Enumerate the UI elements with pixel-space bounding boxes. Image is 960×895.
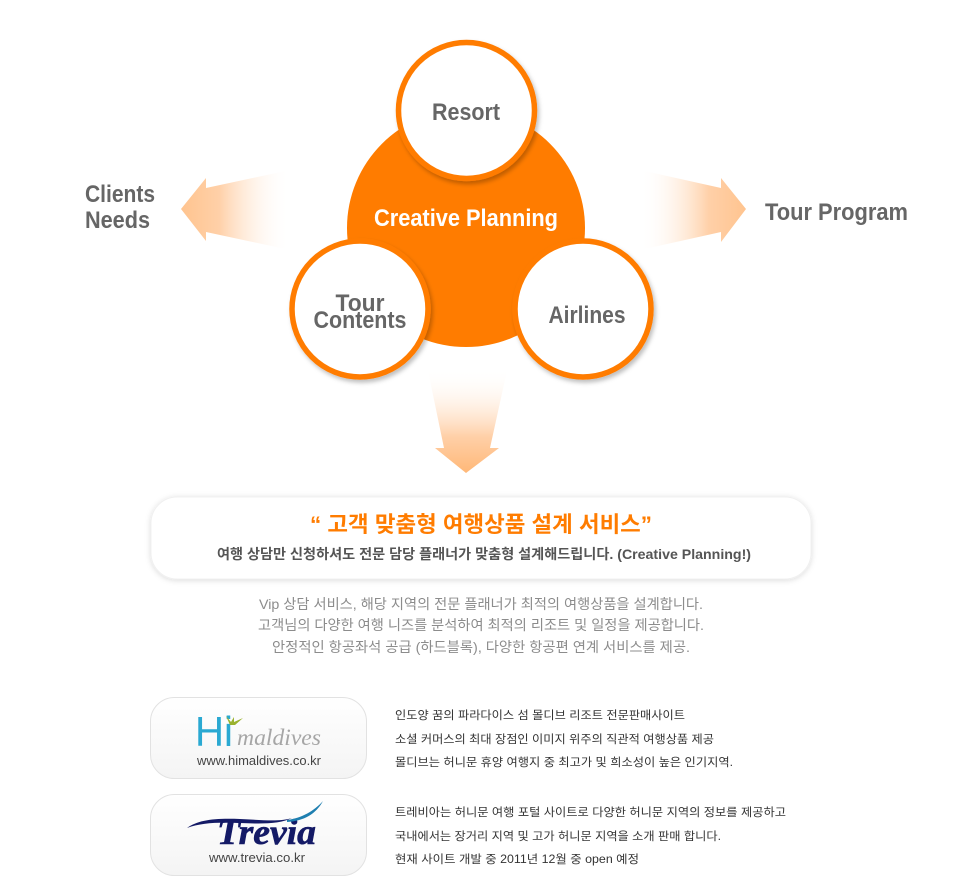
text block: service description: 안정적인 항공좌석 공급 (하드블록), 다양한 항공편 연계 서비스를 제공. <box>272 639 690 655</box>
arrow: to Tour Program <box>640 170 746 250</box>
diagram: creative planning circles <box>292 42 651 377</box>
text block: Trevia description: 트레비아는 허니문 여행 포털 사이트로 다양한 허니문 지역의 정보를 제공하고 <box>395 805 786 819</box>
logo: Himaldives: Hi <box>195 708 233 755</box>
panel: Trevia logo card <box>150 794 366 876</box>
text block: Himaldives description <box>395 709 733 769</box>
text block: Trevia description: 국내에서는 장거리 지역 및 고가 허니문 지역을 소개 판매 합니다. <box>395 830 721 843</box>
center circle <box>347 109 585 347</box>
logo: Trevia <box>187 801 323 852</box>
panel: Himaldives logo card <box>150 698 366 778</box>
circle: Airlines: Airlines <box>548 302 626 329</box>
subheading: 여행 상담만 신청하셔도 전문 담당 플래너가 맞춤형 설계해드립니다. (Creative Planning!) <box>217 546 751 562</box>
circle: Resort <box>398 42 534 178</box>
text block: Trevia description: 현재 사이트 개발 중 2011년 12월 중 open 예정 <box>395 853 639 866</box>
center label: Creative Planning <box>374 205 558 232</box>
label: Needs: Needs <box>85 207 150 234</box>
logo: Himaldives: maldives <box>237 725 321 750</box>
circle: Tour Contents: Tour <box>336 290 384 317</box>
label: Clients Needs: Clients <box>85 181 155 208</box>
circle: Tour Contents <box>292 241 428 377</box>
arrow: to Clients Needs <box>181 170 290 250</box>
logo url: www.himaldives.co.kr <box>196 754 321 768</box>
text block: Trevia description <box>395 805 786 866</box>
label: Tour Program: Tour Program <box>765 199 908 226</box>
logo: Himaldives <box>195 708 321 755</box>
circle: Resort: Resort <box>432 99 500 126</box>
circle: Tour Contents: Contents <box>314 307 406 334</box>
arrow: down to service box <box>427 366 508 473</box>
text block: Himaldives description: 몰디브는 허니문 휴양 여행지 중 최고가 및 희소성이 높은 인기지역. <box>395 756 733 769</box>
circle: Airlines <box>515 241 651 377</box>
text block: Himaldives description: 소셜 커머스의 최대 장점인 이미지 위주의 직관적 여행상품 제공 <box>395 733 714 746</box>
text block: service description: Vip 상담 서비스, 해당 지역의 전문 플래너가 최적의 여행상품을 설계합니다. <box>259 596 703 612</box>
logo url: www.trevia.co.kr <box>208 851 305 865</box>
logo: Trevia: Trevia <box>217 812 316 852</box>
text block: Himaldives description: 인도양 꿈의 파라다이스 섬 몰디브 리조트 전문판매사이트 <box>395 709 685 722</box>
text block: service description <box>258 596 704 655</box>
heading: “ 고객 맞춤형 여행상품 설계 서비스” <box>310 512 652 537</box>
panel: service headline <box>151 497 811 579</box>
text block: service description: 고객님의 다양한 여행 니즈를 분석하여 최적의 리조트 및 일정을 제공합니다. <box>258 617 704 633</box>
